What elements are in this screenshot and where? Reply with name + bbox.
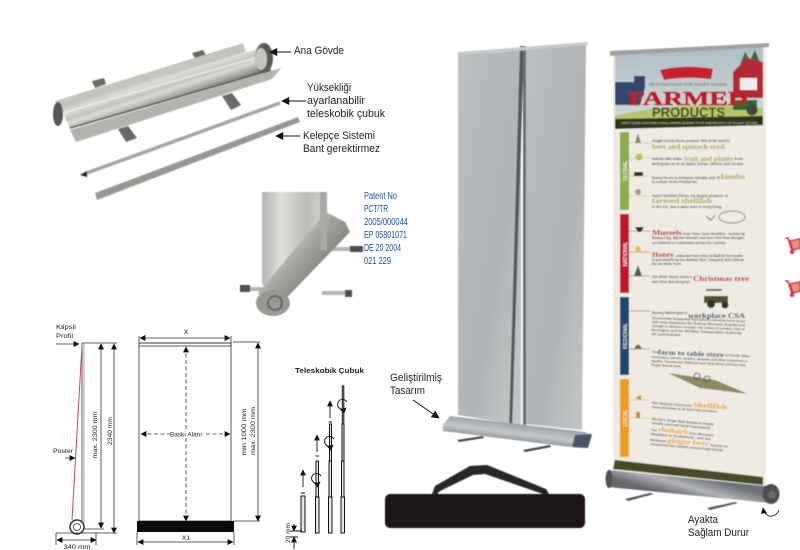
section: regional: all participate. [651, 332, 682, 337]
label: stands firm: Ayakta [688, 514, 719, 526]
rod tip [80, 171, 87, 177]
section: local: from Mountain [689, 431, 714, 437]
label: improved design: Tasarım [390, 385, 425, 397]
section: regional [620, 290, 750, 375]
icon: red trolley 1 [785, 238, 800, 253]
text: patent numbers: 2005/000044 [364, 217, 408, 228]
right banner panel [525, 43, 586, 430]
label: improved design [390, 372, 442, 418]
label: Ana Gövde: Ana Gövde [294, 45, 344, 57]
text: patent numbers: DE 20 2004 [364, 243, 401, 254]
section: regional: Burlington and the Whidbey Transportation Authority [652, 328, 742, 335]
label: telescopic rod: ayarlanabilir [307, 95, 365, 107]
label: telescopic rod [282, 82, 385, 120]
base [443, 416, 592, 448]
section: regional: at Grande Valley [725, 353, 750, 358]
section: national: Bobby Flay, Martha Stewart and Iron Chef Ron Morgan [652, 236, 744, 240]
icon: base feet [92, 50, 241, 142]
label: total height: 2340 mm [107, 417, 114, 445]
text: patent numbers [364, 191, 408, 267]
label: stands firm [688, 514, 749, 539]
section: national: Mussels [652, 229, 682, 237]
photo: base close-up [240, 192, 363, 316]
label: clamp system: Kelepçe Sistemi [303, 130, 375, 142]
section: global: to a buyer in the Philippines. [652, 180, 698, 184]
section: local: Farm welcomes to all local Hub members [652, 405, 717, 414]
printed area label background [170, 430, 203, 438]
section: regional: Boeing Washington's [652, 311, 687, 315]
section: regional: Google in Western Greater, the Cities of Lynden, City of [652, 324, 746, 331]
section: global: Taylor Shellfish Farms, the largest producer of [652, 194, 729, 198]
section: global: Bunny Farms in Arlington recently sold 75 [652, 176, 720, 180]
label: telescopic rod: Yüksekliği [307, 82, 351, 94]
top rail [458, 42, 588, 56]
section: regional: farm to table store [658, 348, 724, 359]
label: stands firm: Sağlam Durur [688, 527, 749, 539]
label: max height: max. 2300 mm [250, 407, 257, 455]
section: national: are featured in restaurants across the country. [652, 241, 726, 245]
section: national: is purchased by the Bottom Bee Company and sold as [652, 258, 744, 262]
diagram: side view [53, 324, 117, 550]
telescopic rod part [84, 103, 280, 174]
diagram: front view [137, 329, 260, 545]
lift arrows [290, 399, 347, 549]
section: local: The [651, 428, 658, 432]
label: profile: Profil [56, 333, 74, 340]
text: patent numbers: 021 229 [364, 256, 391, 267]
section: national: from Silver Bow Evergreen [652, 280, 690, 284]
text: patent numbers: EP 05801071 [364, 230, 407, 241]
section: local: found in [710, 443, 728, 449]
section: regional: (Community Supported Agriculture) connects local farms [652, 316, 745, 323]
section: local: Shellfish [693, 401, 727, 411]
section: global: Skagit County farms produce 50% of the world's [652, 139, 730, 143]
section: global: from [734, 157, 743, 161]
section: local: Port Madison Community [652, 401, 692, 408]
label: poster: Poster [53, 448, 74, 455]
section: global: Bellingham as far as Japan, Europe, Mexico, and Canada. [652, 162, 744, 166]
text: patent numbers: PCT/TR [364, 204, 388, 215]
left banner panel [458, 49, 521, 425]
label: max height: max. 2300 mm [92, 412, 99, 458]
section: regional: workplace CSA [688, 312, 745, 320]
section: regional: with local employees like Boeing, Microsoft, Expedia and [651, 320, 745, 327]
label: 20 mm: 20 mm [285, 523, 292, 543]
base bar [137, 521, 234, 532]
section: global: farmed shellfish [652, 197, 712, 205]
section: national: NATIONAL [623, 241, 629, 266]
section: regional: The [652, 350, 658, 354]
label: improved design: Geliştirilmiş [390, 372, 442, 384]
section: local [620, 373, 748, 457]
stand base with feet [606, 470, 780, 510]
top rail of printed banner [610, 43, 769, 56]
poster title FARMED: FARMED [628, 88, 748, 110]
section: regional: REGIONAL [623, 323, 629, 349]
section: regional: Seattle, Tacoma and Bellevue from local farms serving from [652, 359, 746, 367]
section: regional: Puget Sound area. [651, 363, 682, 368]
section: local: restaurants and markets around Puget Sound. [650, 442, 724, 452]
section: national: Honey [652, 251, 675, 259]
main body tube [53, 43, 281, 142]
poster footer strip [613, 460, 763, 485]
section: local: rhubarb [658, 426, 689, 436]
section: global: Dakota Hills ships [652, 157, 682, 161]
section: national: The White House chose a [652, 275, 692, 279]
section: regional: Provisions, serves vendors, artisans and other customers in [652, 355, 748, 363]
section: global: fruit and plants [684, 155, 733, 163]
icon: rotation arrow [763, 508, 779, 516]
section: local: locally sourced local ingredients. [652, 421, 712, 430]
label: clip profile: Klipsli [56, 324, 76, 331]
centre poles [509, 46, 524, 431]
label: Ana Gövde [270, 45, 344, 57]
section: national: Christmas tree [693, 275, 749, 283]
rod stages [301, 386, 344, 533]
icon: red trolley 2 [785, 281, 800, 296]
poster title PRODUCTS: PRODUCTS [652, 104, 725, 120]
label: X: X [184, 329, 189, 336]
printed poster [613, 45, 766, 486]
photo: exploded base parts [53, 43, 300, 200]
label: clamp system [276, 130, 380, 155]
label: telescopic rod: teleskobik çubuk [307, 108, 385, 120]
poster header illustration [615, 46, 763, 129]
poster strapline: MEET SOME AND FIND LOCAL FARMS WHERE TOUR THE BOUNTY OF PUGET SOUND [621, 121, 757, 125]
diagram: telescopic rod [285, 366, 365, 549]
photo: carry bag [385, 465, 585, 528]
section: national: far as New York. [652, 262, 682, 266]
section: local: LOCAL [623, 410, 629, 426]
label: min height: min 1000 mm [241, 408, 248, 456]
feet [457, 436, 551, 452]
section: global [620, 132, 745, 210]
label: printed area: Baskı Alanı [170, 432, 202, 438]
section: local: Meadows in Snohomish - and the [651, 432, 711, 441]
poster title text: DESTINATIONS FOR PUGET SOUND [649, 82, 728, 87]
section: global: GLOBAL [623, 161, 629, 181]
text: patent numbers: Patent No [364, 191, 397, 202]
section: global: beet and spinach seed. [652, 143, 726, 151]
section: national [620, 211, 749, 293]
label: clamp system: Bant gerektirmez [303, 143, 380, 155]
section: local: Northwest [650, 438, 667, 443]
label: X1: X1 [182, 535, 190, 542]
photo: right printed banner stand [606, 43, 780, 516]
section: local: ginger beer [667, 436, 709, 448]
section: global: in the U.S., has a sales store in Hong Kong. [652, 205, 722, 209]
clamp bar part [95, 117, 300, 200]
section: national: from Penn Cove Shellfish - hosted by [683, 232, 745, 236]
section: local: Rachel's Ginger Beer brewed in Seattle [652, 417, 714, 426]
heading: telescopic rod: Teleskobik Çubuk [295, 366, 365, 375]
photo: centre banner stand [443, 42, 592, 452]
section: national: collected from hives in Bothell Sunnyside [676, 254, 743, 258]
section: global: lambs [721, 173, 745, 181]
